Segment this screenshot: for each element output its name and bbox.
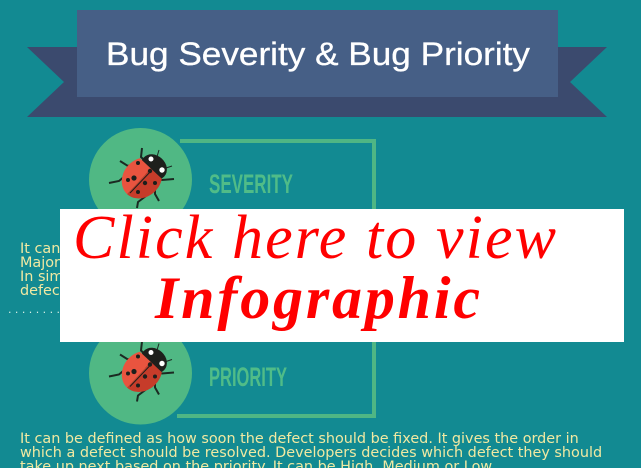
severity description (partly covered): defect (20, 283, 65, 299)
severity frame (180, 141, 374, 215)
click overlay panel (60, 209, 624, 342)
priority label: PRIORITY (209, 362, 287, 392)
overlay line two: Infographic (154, 265, 480, 331)
priority description: It can be defined as how soon the defect should be fixed. It gives the order in (20, 431, 579, 447)
severity description (partly covered) (20, 241, 65, 299)
priority frame (177, 335, 374, 416)
severity description (partly covered): In sim (20, 269, 63, 285)
severity description (partly covered): Major (20, 255, 60, 271)
icon: severity ladybug (89, 128, 192, 231)
severity label: SEVERITY (209, 169, 293, 199)
icon: priority ladybug (89, 322, 192, 424)
ribbon banner (27, 10, 607, 117)
priority description: which a defect should be resolved. Developers decides which defect they should (20, 445, 602, 461)
priority description (20, 431, 602, 468)
dotted divider: ........ (8, 303, 60, 316)
severity description (partly covered): It can (20, 241, 60, 257)
title: Bug Severity & Bug Priority (106, 36, 530, 72)
